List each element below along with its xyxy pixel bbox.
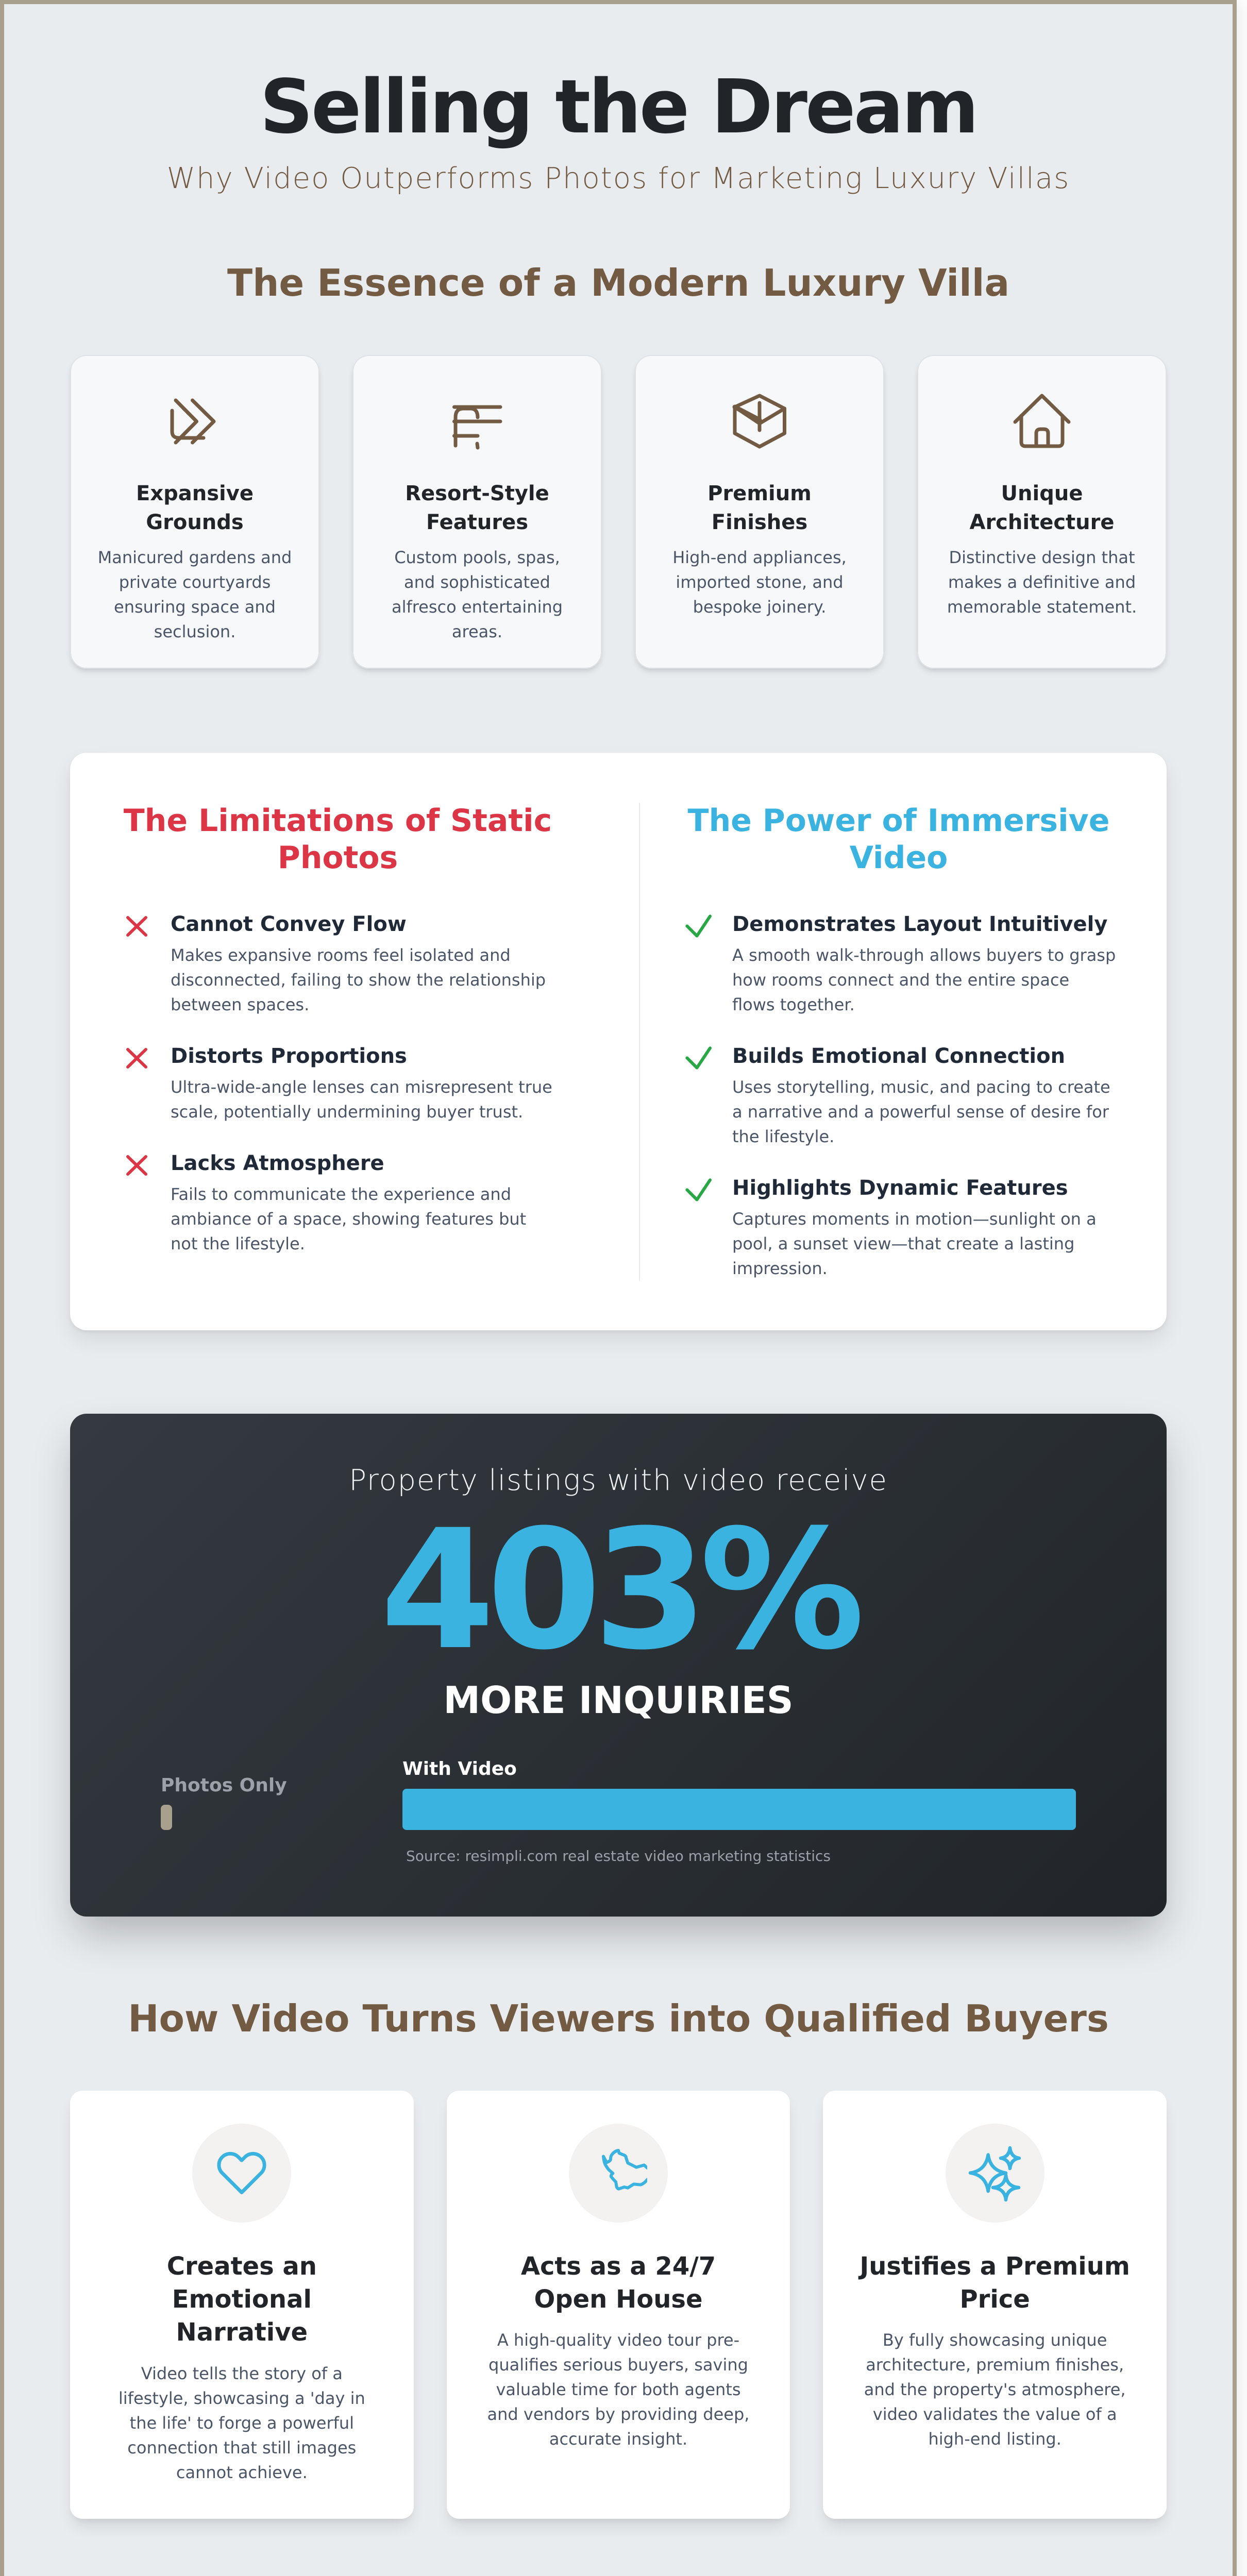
item text: a narrative and a powerful sense of desire for: [732, 1102, 1109, 1122]
item text: Fails to communicate the experience and: [171, 1184, 511, 1204]
limitation: cannot convey flow: [126, 912, 546, 1014]
source note: Source: resimpli.com real estate video marketing statistics: [406, 1848, 831, 1865]
panel: unique architecture card: [917, 355, 1167, 669]
icon: cross: [126, 916, 147, 937]
panel: premium finishes card: [635, 355, 884, 669]
card text: Manicured gardens and: [98, 548, 292, 567]
icon: cross: [126, 1048, 147, 1069]
card text: video validates the value of a: [873, 2404, 1117, 2424]
card text: Video tells the story of a: [141, 2364, 343, 2383]
card heading: Finishes: [712, 511, 807, 534]
card heading: Expansive: [136, 482, 254, 505]
card text: [823, 2328, 1167, 2451]
card text: Custom pools, spas,: [394, 548, 560, 567]
panel: 403 percent statistic: [70, 1414, 1167, 1917]
icon: cross: [120, 1149, 169, 1182]
item text: Ultra-wide-angle lenses can misrepresent true: [171, 1077, 552, 1097]
bar chart: photos vs video: [161, 1754, 1076, 1831]
card heading: Resort-Style: [405, 482, 549, 505]
item text: pool, a sunset view—that create a lasting: [732, 1234, 1074, 1253]
item heading: Builds Emotional Connection: [732, 1044, 1065, 1068]
icon: sparkles in circle: [946, 2124, 1044, 2223]
card heading: [70, 2250, 414, 2349]
card text: valuable time for both agents: [496, 2380, 741, 2399]
heading: how video turns viewers into qualified buyers: How Video Turns Viewers into Qualified Buyers: [128, 1997, 1109, 2040]
card text: imported stone, and: [676, 572, 844, 592]
card text: lifestyle, showcasing a 'day in: [119, 2388, 365, 2408]
item heading: Demonstrates Layout Intuitively: [732, 912, 1107, 936]
item heading: Cannot Convey Flow: [171, 912, 407, 936]
card text: high-end listing.: [928, 2429, 1061, 2449]
item text: flows together.: [732, 995, 855, 1014]
card text: and sophisticated: [404, 572, 550, 592]
card heading: Premium: [707, 482, 812, 505]
limitation: distorts proportions: [126, 1044, 552, 1122]
icon: house: [1013, 394, 1071, 448]
icon: heart in circle: [192, 2124, 291, 2223]
card heading: [405, 482, 549, 534]
item text: [171, 1182, 526, 1256]
bar: photos only: [161, 1805, 172, 1830]
card text: memorable statement.: [947, 597, 1137, 617]
card text: [70, 2361, 414, 2485]
card text: Distinctive design that: [949, 548, 1135, 567]
item text: Makes expansive rooms feel isolated and: [171, 945, 511, 965]
card text: cannot achieve.: [176, 2463, 308, 2482]
card heading: Acts as a 24/7: [521, 2252, 716, 2281]
card text: and the property's atmosphere,: [864, 2380, 1126, 2399]
panel: open house card: [447, 2091, 790, 2519]
card text: areas.: [452, 622, 502, 641]
icon: check: [683, 1174, 732, 1207]
item text: [171, 1077, 552, 1122]
card text: [98, 548, 292, 641]
panel: premium price card: [823, 2091, 1167, 2519]
card heading: Justifies a Premium: [860, 2252, 1130, 2281]
item text: how rooms connect and the entire space: [732, 970, 1069, 990]
icon: double chevron: [170, 399, 215, 444]
card heading: Open House: [534, 2285, 703, 2314]
item heading: Distorts Proportions: [171, 1044, 407, 1068]
icon: check: [683, 1042, 732, 1075]
item text: A smooth walk-through allows buyers to grasp: [732, 945, 1116, 965]
card text: [947, 548, 1137, 617]
card text: makes a definitive and: [948, 572, 1136, 592]
item heading: Highlights Dynamic Features: [732, 1176, 1068, 1200]
item text: between spaces.: [171, 995, 309, 1014]
stat intro: Property listings with video receive: [349, 1464, 888, 1497]
icon: check: [683, 910, 732, 943]
item text: ambiance of a space, showing features but: [171, 1209, 526, 1229]
card text: seclusion.: [154, 622, 235, 641]
item text: scale, potentially undermining buyer trust.: [171, 1102, 523, 1122]
item text: Captures moments in motion—sunlight on a: [732, 1209, 1097, 1229]
limitation: lacks atmosphere: [126, 1151, 526, 1253]
panel: resort-style features card: [352, 355, 602, 669]
card text: connection that still images: [127, 2438, 356, 2458]
card text: ensuring space and: [114, 597, 276, 617]
card text: and vendors by providing deep,: [487, 2404, 749, 2424]
heading: power of immersive video: [687, 803, 1109, 876]
stat caption: MORE INQUIRIES: [443, 1679, 794, 1722]
item text: disconnected, failing to show the relationship: [171, 970, 546, 990]
icon: lounge lines: [452, 405, 502, 449]
item text: the lifestyle.: [732, 1127, 834, 1146]
card heading: [970, 482, 1114, 534]
heading: essence of a modern luxury villa: The Essence of a Modern Luxury Villa: [227, 261, 1009, 304]
card heading: Creates an: [167, 2252, 317, 2281]
card text: private courtyards: [119, 572, 271, 592]
card text: qualifies serious buyers, saving: [488, 2355, 748, 2375]
heading: limitations of static photos: [124, 803, 552, 876]
card heading: [447, 2250, 790, 2316]
bar label: photos only: Photos Only: [161, 1774, 287, 1796]
bar label: with video: With Video: [402, 1758, 517, 1780]
subtitle: Why Video Outperforms Photos for Marketing Luxury Villas: [167, 162, 1070, 195]
heading: power of immersive video: Video: [850, 840, 948, 876]
benefit: demonstrates layout: [683, 910, 1147, 1018]
bar: with video: [402, 1789, 1076, 1830]
big number: 403%: [380, 1495, 856, 1686]
card text: [447, 2328, 790, 2451]
card text: A high-quality video tour pre-: [497, 2330, 739, 2350]
item text: [732, 1207, 1097, 1281]
card text: By fully showcasing unique: [883, 2330, 1107, 2350]
title: Selling the Dream: [260, 63, 977, 150]
card heading: Architecture: [970, 511, 1114, 534]
heading: limitations of static photos: The Limitations of Static: [124, 803, 552, 839]
heading: limitations of static photos: Photos: [278, 840, 398, 876]
card heading: [707, 482, 812, 534]
item text: [171, 945, 546, 1014]
card text: alfresco entertaining: [392, 597, 563, 617]
card text: architecture, premium finishes,: [866, 2355, 1124, 2375]
card heading: Narrative: [176, 2318, 308, 2347]
panel: emotional narrative card: [70, 2091, 414, 2519]
card text: High-end appliances,: [672, 548, 847, 567]
card heading: Unique: [1001, 482, 1083, 505]
card heading: [136, 482, 254, 534]
panel: photos versus video comparison: [70, 753, 1167, 1330]
card heading: Price: [959, 2285, 1030, 2314]
panel: expansive grounds card: [70, 355, 319, 669]
card heading: Grounds: [146, 511, 244, 534]
card text: [672, 548, 847, 617]
icon: cube: [733, 394, 786, 448]
card text: the life' to forge a powerful: [130, 2413, 354, 2433]
item text: impression.: [732, 1259, 828, 1278]
item heading: Lacks Atmosphere: [171, 1151, 384, 1175]
item text: [732, 943, 1116, 1017]
item text: Uses storytelling, music, and pacing to create: [732, 1077, 1110, 1097]
card text: accurate insight.: [549, 2429, 687, 2449]
card text: bespoke joinery.: [693, 597, 826, 617]
card text: [392, 548, 563, 641]
heading: power of immersive video: The Power of Immersive: [688, 803, 1109, 839]
card heading: Emotional: [172, 2285, 312, 2314]
item text: not the lifestyle.: [171, 1234, 305, 1253]
icon: outline shape in circle: [569, 2124, 668, 2223]
benefit: dynamic features: [683, 1174, 1147, 1282]
item text: [732, 1075, 1110, 1149]
card heading: [823, 2250, 1167, 2316]
card heading: Features: [426, 511, 528, 534]
benefit: emotional connection: [683, 1042, 1147, 1150]
